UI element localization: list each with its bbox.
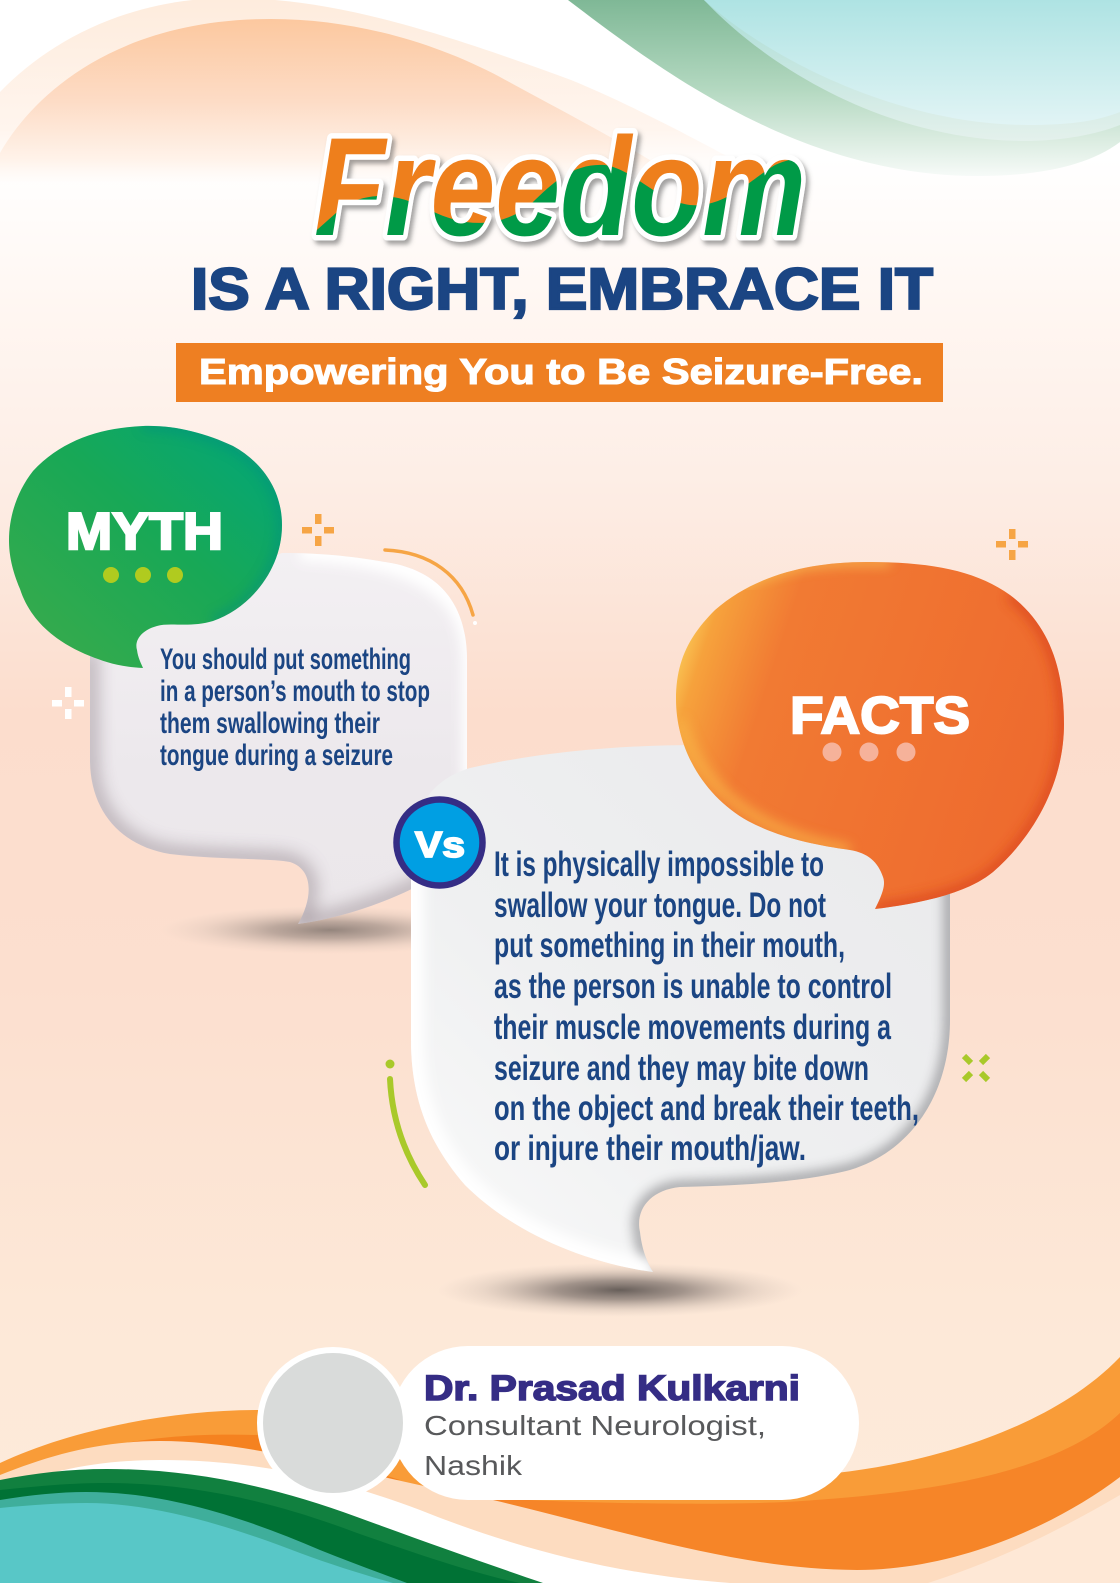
myth white speech bubble bbox=[90, 549, 474, 924]
subtitle banner bbox=[176, 343, 943, 402]
myth statement text: You should put something bbox=[160, 643, 411, 676]
doctor card bbox=[260, 1346, 859, 1500]
facts statement text bbox=[494, 845, 919, 1168]
green arc bbox=[386, 1060, 425, 1185]
doctor city: Nashik bbox=[424, 1450, 523, 1481]
title: Freedom: Freedom bbox=[314, 108, 806, 265]
vs badge bbox=[396, 800, 482, 886]
facts statement text: swallow your tongue. Do not bbox=[494, 886, 826, 925]
myth ground shadow bbox=[160, 906, 500, 954]
doctor name: Dr. Prasad Kulkarni bbox=[424, 1369, 800, 1408]
facts white speech bubble bbox=[411, 745, 950, 1272]
sparkle: orange beside myth bbox=[302, 514, 334, 546]
top left peach waves bbox=[0, 0, 780, 185]
facts statement text: put something in their mouth, bbox=[494, 926, 845, 965]
orange arc bbox=[385, 550, 477, 625]
facts dots bbox=[822, 742, 916, 762]
myth statement text: them swallowing their bbox=[160, 707, 380, 740]
sparkle: green cross right of facts bbox=[964, 1056, 988, 1080]
facts ground shadow bbox=[438, 1263, 802, 1317]
doctor role: Consultant Neurologist, bbox=[424, 1410, 766, 1441]
vs badge: Vs bbox=[415, 824, 465, 865]
facts statement text: their muscle movements during a bbox=[494, 1008, 891, 1047]
facts statement text: as the person is unable to control bbox=[494, 967, 892, 1006]
facts statement text: It is physically impossible to bbox=[494, 845, 824, 884]
label: myth: MYTH bbox=[66, 503, 223, 561]
top right green and teal waves bbox=[568, 0, 1120, 176]
myth dots bbox=[103, 567, 183, 583]
myth statement text: in a person’s mouth to stop bbox=[160, 675, 430, 708]
subtitle banner: Empowering You to Be Seizure-Free. bbox=[199, 351, 923, 392]
bottom tricolour waves bbox=[0, 1357, 1120, 1583]
facts orange speech bubble bbox=[676, 561, 1064, 909]
label: facts: FACTS bbox=[790, 687, 970, 745]
card pill bbox=[391, 1346, 859, 1500]
portrait placeholder bbox=[260, 1350, 406, 1496]
facts statement text: on the object and break their teeth, bbox=[494, 1089, 919, 1128]
sparkle: white left of myth bbox=[52, 687, 84, 719]
myth statement text bbox=[160, 643, 430, 772]
heading: is a right, embrace it: IS A RIGHT, EMBRACE IT bbox=[191, 257, 933, 322]
sparkle: orange above facts bbox=[996, 529, 1028, 560]
myth statement text: tongue during a seizure bbox=[160, 739, 393, 772]
facts statement text: or injure their mouth/jaw. bbox=[494, 1129, 806, 1168]
facts statement text: seizure and they may bite down bbox=[494, 1049, 869, 1088]
myth green speech bubble bbox=[9, 426, 282, 668]
